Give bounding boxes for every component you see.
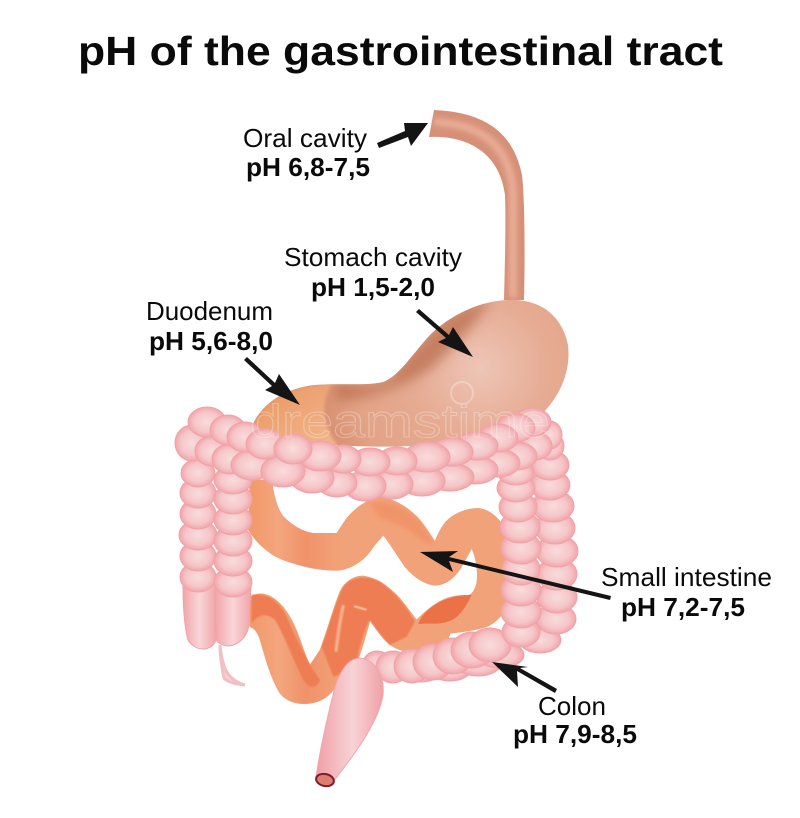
arrow: duodenum <box>244 357 300 405</box>
organ: sigmoid colon <box>362 628 524 683</box>
organ: esophagus <box>429 110 525 300</box>
label: duodenum <box>146 296 273 356</box>
label: small intestine: Small intestine <box>601 562 772 592</box>
arrow: small intestine <box>420 551 611 600</box>
title: pH of the gastrointestinal tract <box>78 28 723 74</box>
label: stomach cavity: Stomach cavity <box>284 242 462 272</box>
label: small intestine <box>601 562 772 622</box>
organ: rectum <box>315 658 383 788</box>
shade: middle loop <box>322 578 415 677</box>
label: stomach cavity: pH 1,5-2,0 <box>311 272 435 302</box>
organ: descending colon <box>497 432 578 653</box>
arrow: colon <box>492 662 557 693</box>
highlight: middle loop <box>336 605 343 652</box>
shade: lower left fold <box>252 595 320 687</box>
organ: stomach <box>253 300 568 447</box>
label: oral cavity <box>243 123 370 182</box>
organ: appendix <box>220 645 245 685</box>
label: small intestine: pH 7,2-7,5 <box>621 592 745 622</box>
label: colon: pH 7,9-8,5 <box>513 719 637 749</box>
label: colon: Colon <box>538 691 606 721</box>
label: duodenum: Duodenum <box>146 296 273 326</box>
arrow: stomach cavity <box>416 309 473 357</box>
organ: ascending colon <box>179 459 252 649</box>
label: oral cavity: pH 6,8-7,5 <box>246 152 370 182</box>
arrow: oral cavity <box>377 123 428 148</box>
watermark: dreamstime <box>250 395 550 447</box>
shade: upper fold <box>370 502 434 543</box>
label: duodenum: pH 5,6-8,0 <box>149 326 273 356</box>
organ: small intestine <box>248 480 509 704</box>
label: oral cavity: Oral cavity <box>243 123 367 153</box>
shade: lower fold <box>418 595 472 624</box>
label: colon <box>513 691 637 749</box>
watermark <box>250 382 550 447</box>
organ: transverse colon <box>175 407 562 501</box>
label: stomach cavity <box>284 242 462 302</box>
